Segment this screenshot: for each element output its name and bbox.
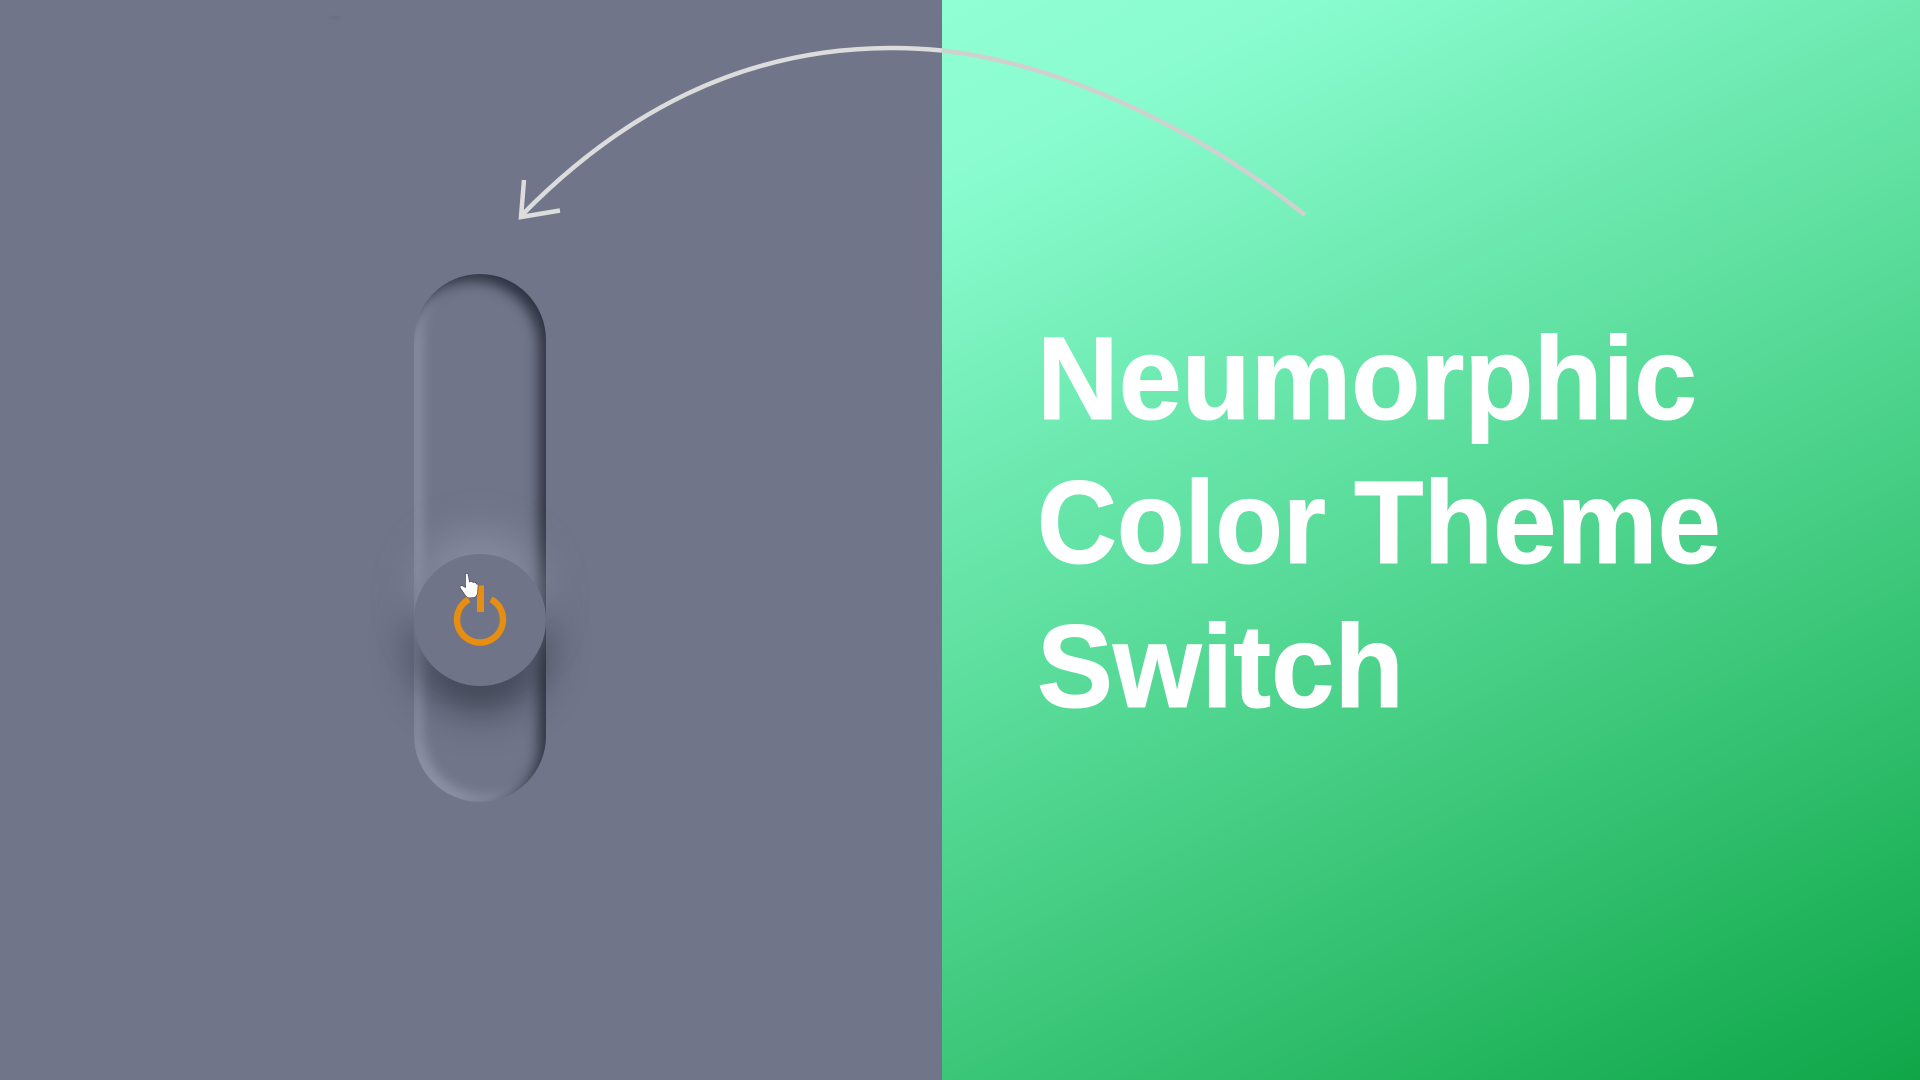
switch track xyxy=(414,274,546,802)
title: Color xyxy=(1037,457,1326,589)
switch knob xyxy=(414,554,546,686)
title: Neumorphic xyxy=(1037,313,1697,445)
panel: neumorphic switch on grey background xyxy=(0,0,942,1080)
title: Switch xyxy=(1037,601,1404,733)
title: Theme xyxy=(1354,457,1721,589)
icon: hand cursor xyxy=(460,573,478,598)
icon: power symbol xyxy=(454,586,506,646)
panel: green gradient background xyxy=(942,0,1920,1080)
